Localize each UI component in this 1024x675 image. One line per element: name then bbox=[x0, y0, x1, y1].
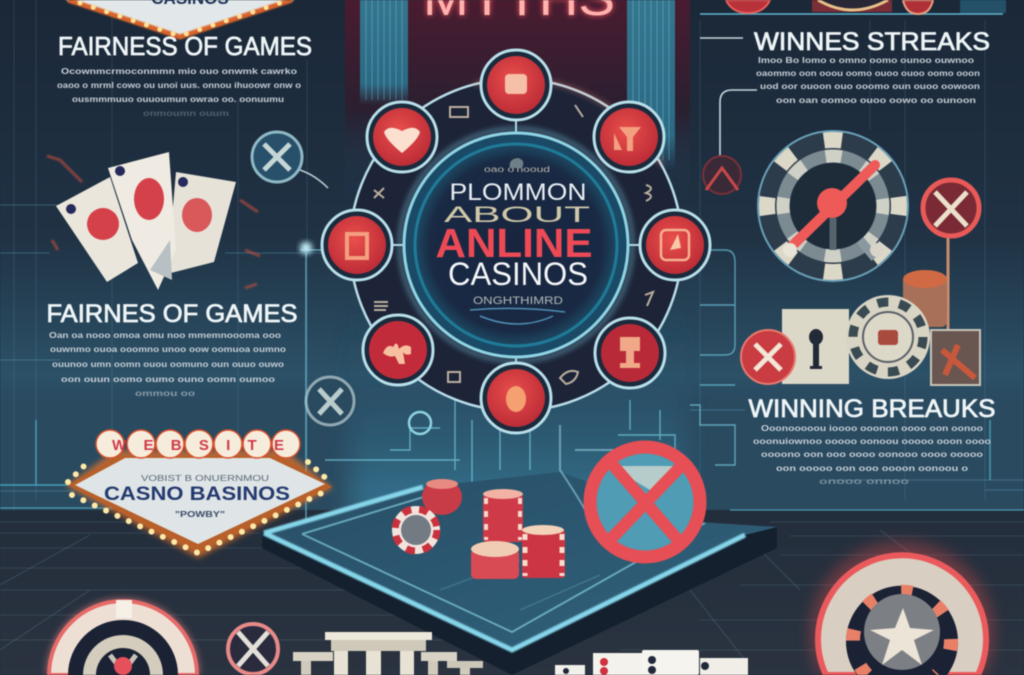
icon: small red x bbox=[703, 156, 741, 194]
glass panel above platform bbox=[560, 425, 640, 510]
icon: question card bbox=[782, 309, 849, 384]
text block: top left: ousmmmuuo ouuoumun owrao oo. oonuumu bbox=[72, 95, 284, 104]
text block: top left: Ocownmcrmoconmmn mio ouo onwmk cawrko bbox=[61, 67, 297, 76]
text block: top left: onmoumn ouum bbox=[143, 109, 229, 118]
icon: roulette wheel bottom left bbox=[45, 597, 201, 675]
text block: lower right bbox=[753, 424, 991, 486]
node: right bbox=[640, 210, 710, 280]
small ring glyphs bbox=[374, 105, 653, 384]
text block: top right: oaommo oon ooou oomo ouoo ouoo oomo ooon bbox=[756, 69, 980, 78]
central disc bbox=[400, 129, 632, 361]
text block: lower right: oooono oon ooo oooo oonooo oooo ooooo bbox=[761, 450, 983, 459]
marquee letters: WEBSITE bbox=[112, 437, 284, 454]
ring text: PLOMMON bbox=[450, 179, 586, 206]
icon: three playing cards bbox=[47, 152, 260, 290]
text block: top right: Imoo Bo lomo o omno oomo ounoo ouwnoo bbox=[758, 56, 974, 65]
text block: left middle: Oan oa nooo omoa omu noo mmemnoooma ooo bbox=[49, 331, 281, 340]
sign: casino basinos: CASNO BASINOS bbox=[104, 484, 290, 505]
node: top right bbox=[594, 102, 664, 172]
icon: cup and box group bbox=[903, 270, 980, 385]
heading: winning breauks: WINNING BREAUKS bbox=[748, 395, 996, 423]
text block: left middle: ouunoo umn oomn ouou oomuno oun ouuo ouwo bbox=[52, 360, 284, 369]
marquee bubbles bbox=[96, 430, 300, 458]
text block: lower right: Ooonooooou ioooo ooonon oooo oon oonoo bbox=[761, 424, 983, 433]
icon: red x sign on pole bbox=[923, 180, 979, 330]
text block: top left: oaoo o mrml cowo ou unoi uus. onnou ihuoowr onw o bbox=[57, 81, 301, 90]
text block: left middle: oon ouun oomo oumo ouno oomn oumoo bbox=[61, 375, 275, 384]
icon: red x badge bbox=[741, 330, 795, 384]
text block: left middle bbox=[49, 331, 286, 398]
text block: top right: oon oan oomoo ouoo oowo oo ounoon bbox=[776, 96, 976, 105]
heading: fairness of games (top): FAIRNESS OF GAMES bbox=[58, 31, 312, 61]
ring text: CASINOS bbox=[448, 256, 588, 292]
sign: casino basinos: VOBIST B ONUERNMOU bbox=[141, 473, 269, 483]
circuit lines around the ring bbox=[300, 38, 757, 520]
background floor bbox=[0, 508, 1024, 675]
text block: lower right: ooonuiownoo ooooo oonoou ooooo ooon oooo bbox=[753, 437, 991, 446]
text block: lower right: oon ooooo oon ooo oooon oonoou o bbox=[776, 464, 968, 473]
text block: left middle: ouwnmo ouoa ooomno unoo oow oomuoa oumno bbox=[50, 345, 286, 354]
ring diagram: common myths about online casinos bbox=[322, 50, 710, 433]
top right strip bbox=[700, 0, 1006, 14]
heading: fairness of games (second): FAIRNES OF GAMES bbox=[46, 300, 298, 328]
ring text: oao o'nooud bbox=[484, 165, 550, 174]
text block: left middle: ommou oo bbox=[135, 389, 195, 398]
node: bottom right bbox=[595, 318, 665, 388]
text block: top left bbox=[57, 67, 301, 118]
icon: small x circle lower left bbox=[306, 377, 354, 425]
node: top left bbox=[367, 102, 437, 172]
sign: casino basinos: "POWBY" bbox=[175, 510, 225, 519]
platform bbox=[262, 472, 777, 675]
icon: roulette wheel bottom right with star bbox=[810, 541, 994, 675]
node: bottom left bbox=[363, 315, 433, 385]
sign: top left casino sign bbox=[65, 0, 295, 38]
poker chips bbox=[392, 479, 565, 579]
text block: lower right: onooo onnoo bbox=[819, 477, 909, 486]
node: left bbox=[322, 210, 392, 280]
text block: top right bbox=[756, 56, 980, 105]
ring text: ONGHTHIMRD bbox=[473, 295, 563, 307]
icon: x circle left bbox=[252, 132, 328, 188]
ring text: ABOUT bbox=[444, 202, 590, 227]
ring text bbox=[436, 158, 592, 324]
icon: x circle bottom bbox=[228, 624, 278, 674]
ring text: ANLINE bbox=[436, 220, 592, 266]
sign: casino basinos bbox=[66, 430, 333, 558]
icon: large no sign bbox=[585, 442, 705, 562]
node: top bbox=[481, 50, 551, 120]
pillars of light behind the title bbox=[360, 0, 675, 170]
node: bottom bbox=[481, 363, 551, 433]
heading: winnes streaks: WINNES STREAKS bbox=[754, 28, 990, 56]
icon: playing cards bottom bbox=[555, 650, 748, 675]
icon: poker chip bbox=[846, 295, 930, 379]
icon: greek temple bbox=[293, 632, 483, 675]
background wall bbox=[0, 0, 1024, 520]
ring band bbox=[350, 79, 682, 411]
text block: top right: uod oor ouoon ouo ooomo oun ouoo oowoon bbox=[760, 82, 980, 91]
icon: roulette wheel right bbox=[758, 131, 908, 281]
